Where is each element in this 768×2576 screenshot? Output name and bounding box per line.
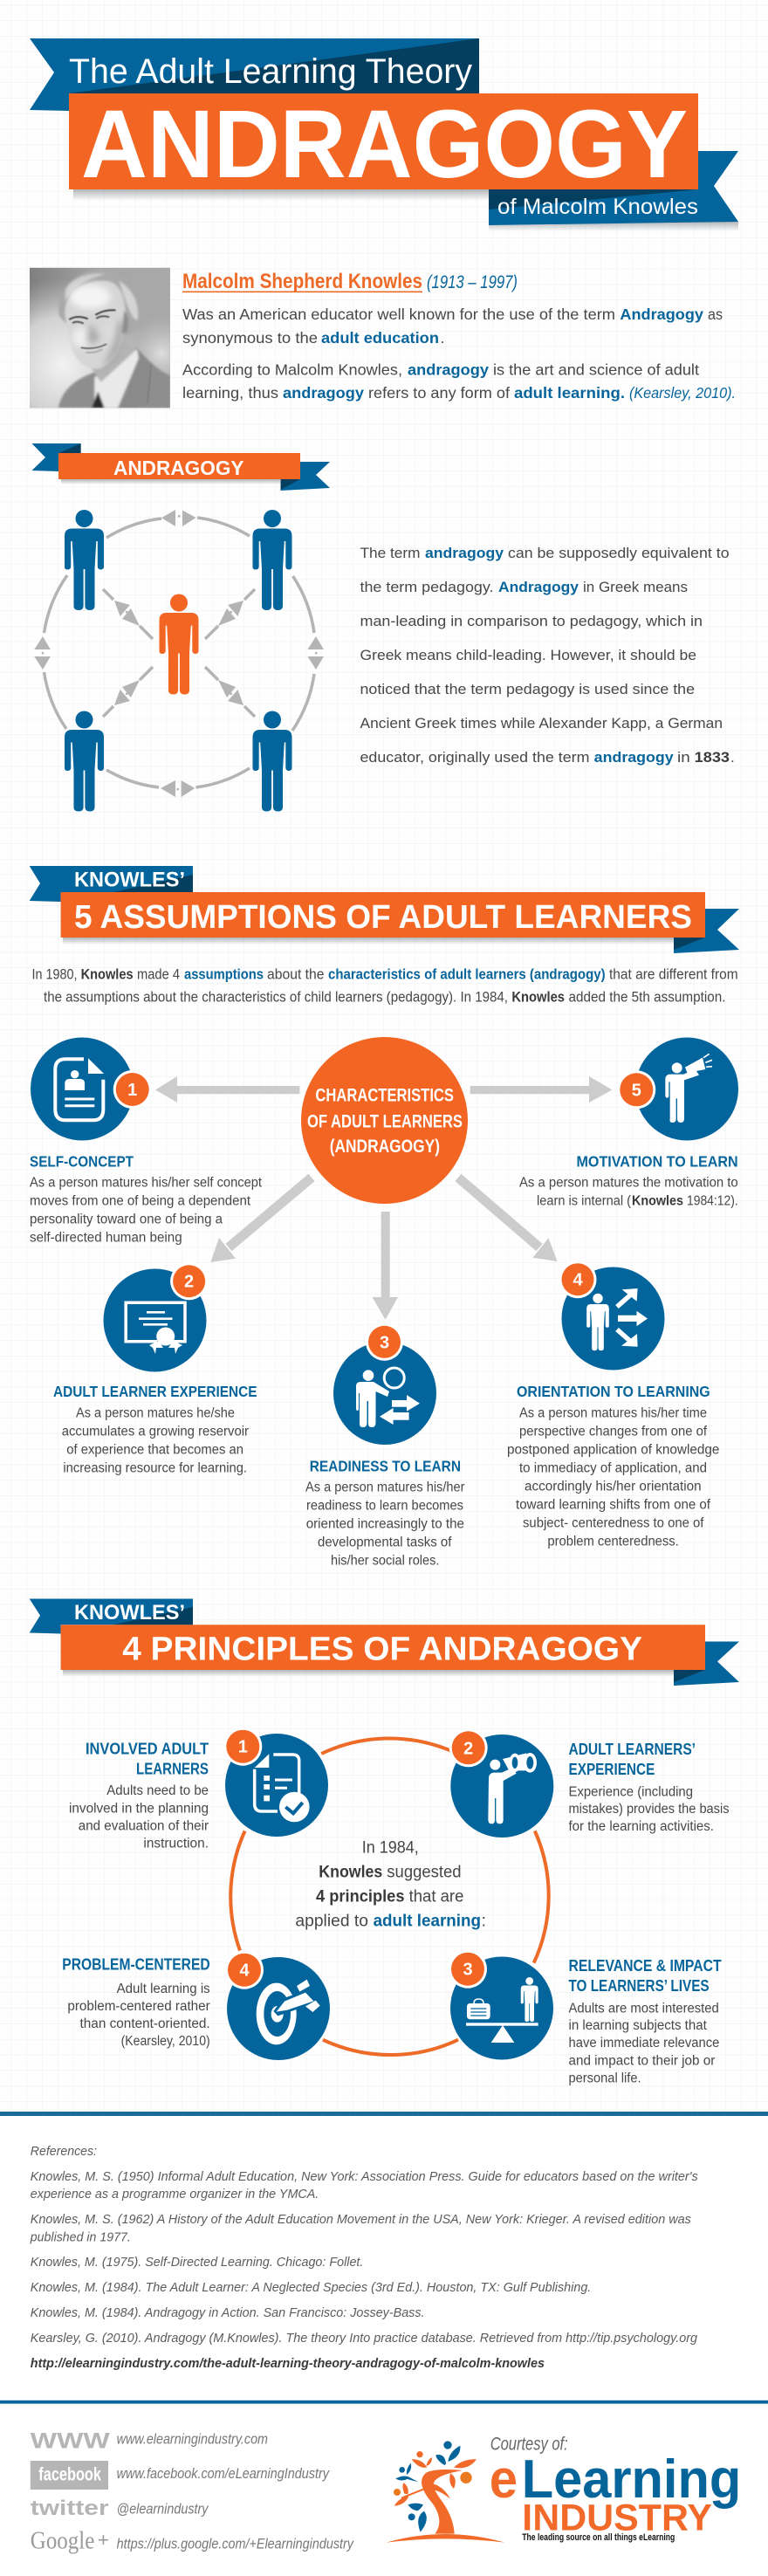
references list: experience as a programme organizer in the YMCA. [31, 2188, 319, 2202]
andragogy description text: Ancient Greek times while Alexander Kapp, a German [360, 715, 723, 732]
heading and description: ADULT LEARNER EXPERIENCE [53, 1383, 257, 1400]
heading and description [30, 1153, 263, 1246]
learner figure: top left [65, 510, 104, 610]
badge 3: 3 [380, 1333, 389, 1352]
bio paragraph 1: synonymous to the [182, 329, 318, 347]
badge 2: 2 [463, 1739, 473, 1758]
references list: Kearsley, G. (2010). Andragogy (M.Knowles). The theory Into practice database. Retrieved from http://tip.psychology.org [31, 2332, 697, 2346]
heading and description [519, 1153, 738, 1208]
tagline: The leading source on all things eLearning [522, 2532, 675, 2543]
arrow to 5 [470, 1076, 613, 1103]
heading and description: TO LEARNERS’ LIVES [569, 1977, 710, 1995]
andragogy description text: andragogy [594, 749, 674, 766]
heading and description: EXPERIENCE [569, 1761, 655, 1778]
heading and description: ADULT LEARNERS’ [569, 1741, 696, 1758]
elearning industry logo [387, 2435, 741, 2543]
heading and description: personal life. [569, 2071, 641, 2085]
section banner: 4 principles [30, 1599, 739, 1686]
section banner: 5 assumptions: KNOWLES’ [74, 869, 185, 892]
references list: http://elearningindustry.com/the-adult-learning-theory-andragogy-of-malcolm-knowles [31, 2357, 545, 2371]
wordmark: eLearning: e [490, 2449, 518, 2510]
andragogy description text: man-leading in comparison to pedagogy, which in [360, 613, 703, 629]
central text: 4 principles note: 4 principles [316, 1888, 405, 1906]
badge 1 [113, 1070, 152, 1109]
title orange bar [69, 93, 698, 189]
andragogy description text: noticed that the term pedagogy is used since the [360, 681, 695, 697]
section banner: ANDRAGOGY: ANDRAGOGY [113, 457, 244, 479]
assumptions intro text: about the [267, 967, 325, 983]
andragogy description text: andragogy [425, 545, 504, 561]
heading and description: accordingly his/her orientation [525, 1480, 702, 1494]
diagonal connectors [103, 589, 255, 717]
assumptions intro text: that are different from [609, 967, 738, 983]
heading and description: instruction. [143, 1837, 209, 1851]
icon: document with person [31, 1037, 134, 1140]
title line: The Adult Learning Theory: The Adult Learning Theory [69, 52, 472, 91]
heading and description: and impact to their job or [569, 2053, 715, 2068]
learner figure: bottom right [252, 711, 291, 812]
badge 3: 3 [463, 1961, 473, 1980]
heading and description: increasing resource for learning. [63, 1461, 247, 1476]
heading and description: than content-oriented. [80, 2016, 210, 2031]
assumption 5: motivation to learn [519, 1037, 738, 1208]
central text: 4 principles note: that are [409, 1888, 463, 1906]
section banner: 4 principles: KNOWLES’ [74, 1601, 185, 1625]
references list: Knowles, M. S. (1950) Informal Adult Education, New York: Association Press. Guide for educators based on the writer's [31, 2170, 698, 2184]
twitter row: twitter [31, 2497, 109, 2520]
website row [31, 2428, 268, 2453]
badge 3 [366, 1323, 403, 1361]
assumptions intro text [31, 967, 738, 1006]
icon: balance with briefcase and person [450, 1957, 553, 2060]
icon: person with binoculars [450, 1735, 553, 1838]
icon: checklist [225, 1734, 328, 1837]
assumption 1: self-concept [30, 1037, 263, 1246]
heading and description: Adult learning is [117, 1982, 210, 1996]
references list [30, 2145, 698, 2371]
facebook row: www.facebook.com/eLearningIndustry [117, 2465, 330, 2482]
ring arrowheads [34, 510, 324, 797]
principle 3: relevance and impact [449, 1950, 722, 2085]
bio paragraph 1: Was an American educator well known for the use of the term [182, 306, 615, 323]
heading and description: Adults need to be [106, 1783, 209, 1798]
title line: of Malcolm Knowles: of Malcolm Knowles [497, 195, 698, 219]
google plus row: + [98, 2529, 109, 2551]
arrow to 2 [210, 1178, 312, 1262]
learner figure: top right [252, 510, 291, 610]
heading and description: READINESS TO LEARN [310, 1457, 461, 1474]
heading and description: RELEVANCE & IMPACT [569, 1957, 722, 1975]
badge 4 [559, 1261, 597, 1298]
bio paragraph 1: as [708, 306, 723, 323]
heading and description: involved in the planning [69, 1801, 209, 1816]
assumptions intro text: characteristics of adult learners (andragogy) [328, 967, 606, 983]
title banner [30, 38, 738, 231]
heading and description [53, 1383, 257, 1476]
assumptions intro text: added the 5th assumption. [569, 990, 726, 1006]
heading and description: and evaluation of their [79, 1818, 209, 1833]
arrow to 1 [155, 1076, 299, 1103]
heading and description [569, 1741, 730, 1834]
network diagram: teacher and learners [34, 510, 324, 812]
bio name: Malcolm Shepherd Knowles [182, 270, 422, 293]
hub circle: characteristics of adult learners: (ANDRAGOGY) [330, 1137, 440, 1157]
bio paragraph 2: andragogy [408, 361, 489, 379]
heading and description: LEARNERS [136, 1760, 209, 1777]
heading and description: As a person matures his/her [305, 1480, 464, 1494]
hub circle: characteristics of adult learners: OF ADULT LEARNERS [307, 1112, 463, 1132]
badge 4 [225, 1951, 264, 1989]
assumptions intro text: In 1980, [31, 967, 77, 983]
heading and description [62, 1956, 210, 2049]
bio paragraph 2: (Kearsley, 2010). [629, 384, 736, 402]
arrow to 4 [458, 1178, 558, 1261]
icon: person with magnifier and arrows [333, 1342, 436, 1445]
facebook row: facebook [38, 2465, 101, 2485]
heading and description: in learning subjects that [569, 2018, 707, 2033]
bio paragraph 2: learning, thus [182, 384, 278, 402]
principle 4: problem-centered [62, 1951, 330, 2060]
website row: www.elearningindustry.com [117, 2430, 268, 2447]
heading and description: As a person matures his/her time [519, 1406, 707, 1421]
facebook row [31, 2461, 330, 2490]
heading and description: SELF-CONCEPT [30, 1153, 134, 1171]
title line: ANDRAGOGY: ANDRAGOGY [81, 91, 688, 198]
bio paragraph 1: adult education [321, 329, 439, 347]
heading and description: readiness to learn becomes [306, 1498, 463, 1513]
heading and description: problem-centered rather [67, 1999, 210, 2014]
heading and description: self-directed human being [30, 1231, 182, 1246]
andragogy description text: 1833 [695, 749, 730, 766]
heading and description: Knowles [632, 1193, 683, 1208]
references list: Knowles, M. (1984). Andragogy in Action. San Francisco: Jossey-Bass. [31, 2306, 425, 2320]
title shadow [73, 189, 489, 201]
icon: target and dart [227, 1957, 330, 2060]
courtesy label: Courtesy of: [490, 2435, 568, 2455]
heading and description: As a person matures his/her self concept [30, 1175, 263, 1190]
hub circle: characteristics of adult learners: CHARACTERISTICS [315, 1086, 454, 1106]
footer divider [0, 2400, 768, 2404]
assumptions intro text: Knowles [81, 967, 134, 983]
references list: References: [31, 2145, 97, 2159]
wordmark: INDUSTRY: INDUSTRY [522, 2497, 712, 2538]
badge 4: 4 [573, 1271, 583, 1290]
badge 5: 5 [632, 1081, 641, 1100]
heading and description: accumulates a growing reservoir [62, 1425, 249, 1439]
heading and description: oriented increasingly to the [306, 1516, 464, 1531]
central text: 4 principles note: suggested [387, 1863, 462, 1881]
references list: Knowles, M. (1975). Self-Directed Learning. Chicago: Follet. [31, 2256, 363, 2270]
hub circle: characteristics of adult learners [301, 1037, 468, 1204]
section banner: ANDRAGOGY [31, 443, 330, 491]
bio paragraph 1: Andragogy [620, 306, 703, 323]
assumptions intro text: Knowles [511, 990, 565, 1006]
heading and description: his/her social roles. [331, 1553, 439, 1568]
heading and description: subject- centeredness to one of [523, 1516, 704, 1531]
heading and description: 1984:12). [687, 1193, 738, 1208]
heading and description: have immediate relevance [569, 2036, 719, 2050]
wordmark: eLearning: Learning [522, 2449, 741, 2510]
title ribbon: lower blue [489, 151, 738, 231]
icon: person with three arrows [562, 1267, 665, 1370]
badge 1: 1 [238, 1738, 248, 1757]
section banner: 4 principles: 4 PRINCIPLES OF ANDRAGOGY [122, 1631, 642, 1667]
ring connectors [44, 518, 314, 787]
andragogy description text: Greek means child-leading. However, it should be [360, 647, 696, 663]
heading and description: PROBLEM-CENTERED [62, 1956, 210, 1974]
heading and description: for the learning activities. [569, 1819, 714, 1834]
heading and description: ORIENTATION TO LEARNING [517, 1383, 710, 1400]
heading and description: to immediacy of application, and [519, 1461, 707, 1476]
badge 1: 1 [127, 1081, 137, 1100]
central text: 4 principles note: adult learning [374, 1912, 481, 1931]
heading and description: moves from one of being a dependent [30, 1193, 251, 1208]
heading and description: postponed application of knowledge [507, 1443, 719, 1458]
heading and description [305, 1457, 464, 1568]
central text: 4 principles note [295, 1838, 486, 1931]
heading and description [507, 1383, 719, 1549]
central text: 4 principles note: : [482, 1912, 486, 1931]
heading and description [569, 1957, 722, 2085]
heading and description: personality toward one of being a [30, 1212, 223, 1226]
website row: WWW [31, 2428, 110, 2453]
bio paragraph 1 [182, 306, 723, 347]
heading and description [69, 1740, 209, 1851]
heading and description: MOTIVATION TO LEARN [576, 1153, 738, 1171]
andragogy description text: in Greek means [583, 579, 688, 595]
bio paragraph 2: andragogy [283, 384, 364, 402]
heading and description: developmental tasks of [318, 1535, 452, 1549]
icon: certificate [103, 1269, 206, 1372]
badge 3 [449, 1950, 487, 1989]
andragogy description text [360, 545, 735, 766]
badge 5 [617, 1070, 655, 1109]
twitter row: @elearnindustry [117, 2500, 209, 2518]
heading and description: mistakes) provides the basis [569, 1802, 730, 1817]
badge 2 [449, 1728, 488, 1767]
assumption 4: orientation to learning [507, 1261, 719, 1549]
bio name: (1913 – 1997) [427, 272, 518, 292]
assumption 3: readiness to learn [305, 1323, 464, 1568]
bio paragraph 2: According to Malcolm Knowles, [182, 361, 402, 379]
icon: person with megaphone [635, 1037, 738, 1140]
andragogy description text: in [677, 749, 690, 766]
orange ring connecting principles [230, 1738, 549, 2055]
references list: published in 1977. [30, 2230, 131, 2244]
badge 4: 4 [239, 1961, 250, 1981]
google plus row: https://plus.google.com/+Elearningindustry [117, 2535, 354, 2552]
heading and description: As a person matures the motivation to [519, 1175, 738, 1190]
heading and description: perspective changes from one of [519, 1425, 708, 1439]
andragogy description text: The term [360, 545, 421, 561]
andragogy description text: the term pedagogy. [360, 579, 494, 595]
andragogy description text: can be supposedly equivalent to [508, 545, 730, 561]
assumptions intro text: the assumptions about the characteristics of child learners (pedagogy). In 1984, [44, 990, 508, 1006]
arrow to 3 [372, 1212, 398, 1320]
hub arrows [155, 1076, 613, 1320]
social links [31, 2428, 354, 2554]
central text: 4 principles note: Knowles [319, 1863, 382, 1881]
assumptions intro text: assumptions [184, 967, 264, 983]
heading and description: INVOLVED ADULT [86, 1740, 209, 1757]
learner figure: bottom left [65, 711, 104, 812]
principle 2: adult learners' experience [449, 1728, 730, 1838]
section banner: 5 assumptions [30, 866, 739, 953]
heading and description: (Kearsley, 2010) [121, 2034, 210, 2049]
andragogy description text: Andragogy [498, 579, 579, 595]
heading and description: learn is internal ( [537, 1193, 632, 1208]
principle 1: involved adult learners [69, 1728, 328, 1851]
section banner: 5 assumptions: 5 ASSUMPTIONS OF ADULT LEARNERS [74, 899, 692, 936]
icon: tree [387, 2441, 504, 2543]
assumptions intro text: made 4 [137, 967, 180, 983]
badge 1 [223, 1728, 262, 1766]
references list: Knowles, M. (1984). The Adult Learner: A Neglected Species (3rd Ed.). Houston, TX: Gulf Publishing. [31, 2281, 591, 2295]
heading and description: of experience that becomes an [66, 1443, 243, 1458]
portrait photo of Malcolm Knowles [30, 268, 170, 408]
references list: Knowles, M. S. (1962) A History of the Adult Education Movement in the USA, New York: Krieger. A revised edition was [31, 2213, 691, 2227]
bio paragraph 2 [182, 361, 736, 402]
bio paragraph 2: is the art and science of adult [493, 361, 699, 379]
title ribbon: upper blue [30, 38, 479, 111]
twitter row [31, 2497, 209, 2520]
central figure [159, 594, 199, 695]
badge 2 [170, 1262, 208, 1300]
heading and description: toward learning shifts from one of [516, 1498, 711, 1513]
google plus row: Google [31, 2528, 94, 2554]
heading and description: Experience (including [569, 1784, 693, 1799]
bio text block [182, 270, 736, 402]
heading and description: problem centeredness. [547, 1535, 679, 1549]
central text: 4 principles note: In 1984, [362, 1838, 419, 1857]
bio paragraph 2: adult learning. [514, 384, 625, 402]
badge 2: 2 [184, 1273, 194, 1292]
central text: 4 principles note: applied to [295, 1912, 368, 1931]
references divider [0, 2112, 768, 2116]
andragogy description text: . [730, 749, 735, 766]
google plus row [31, 2528, 354, 2554]
heading and description: As a person matures he/she [76, 1406, 235, 1421]
assumption 2: adult learner experience [53, 1262, 257, 1476]
bio paragraph 1: . [440, 329, 444, 347]
andragogy description text: educator, originally used the term [360, 749, 590, 766]
heading and description: Adults are most interested [569, 2001, 719, 2016]
bio paragraph 2: refers to any form of [368, 384, 510, 402]
